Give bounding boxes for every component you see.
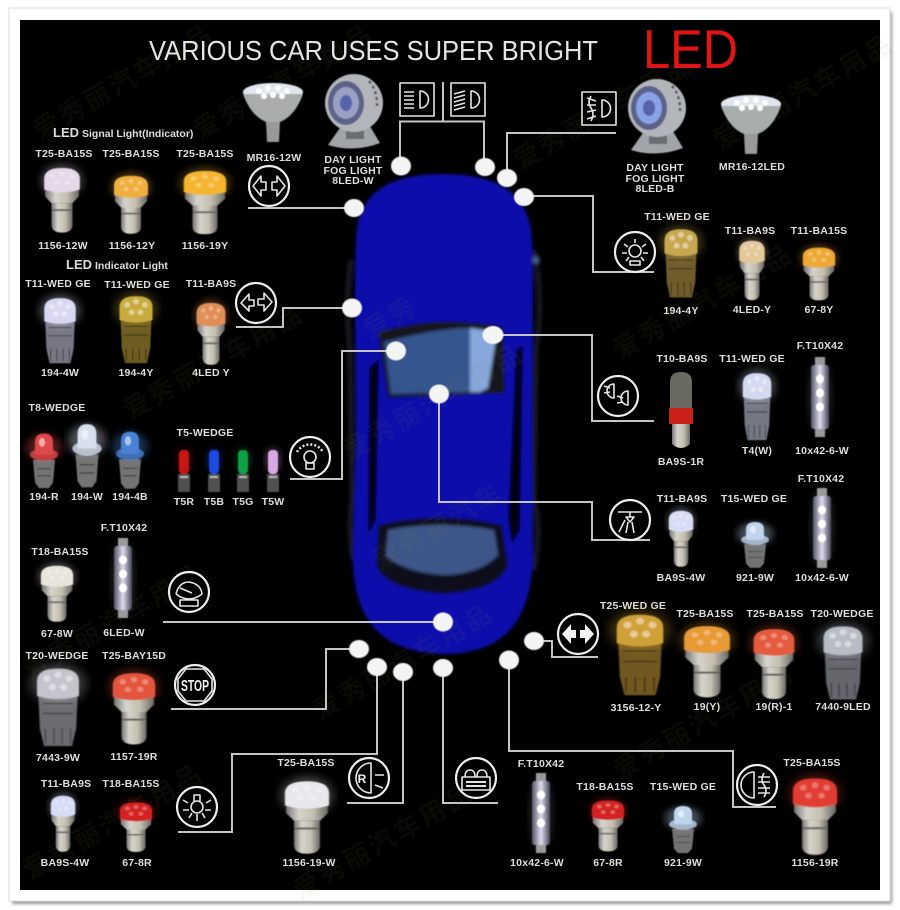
bulb: 4LED-Y	[725, 225, 775, 316]
bulb: 67-8Y: T11-BA15S	[791, 225, 847, 237]
bulb: BA9S-1R	[656, 353, 708, 468]
bulb: BA9S-4W	[41, 778, 91, 869]
watermark: 爱秀丽汽车用品	[606, 653, 800, 787]
bulb group: T5 wedge: T5B	[204, 496, 224, 508]
bulb: 67-8R rear left: T18-BA15S	[102, 778, 160, 790]
blue car top view	[348, 174, 540, 654]
bulb group: T8 wedge: 194-W	[71, 491, 103, 503]
bulb: 194-4Y	[104, 279, 170, 379]
bulb: 1156-19Y: T25-BA15S	[176, 148, 234, 160]
icon: license plate lamp	[169, 572, 209, 612]
bulb group: T5 wedge: T5R	[174, 496, 194, 508]
bulb: 1156-19R: 1156-19R	[791, 857, 839, 869]
watermark: 爱秀丽汽车用品	[286, 773, 480, 907]
bulb: 19(R)-1	[746, 608, 804, 713]
watermark: 爱秀丽汽车用品	[606, 233, 800, 367]
bulb: 1156-19R: T25-BA15S	[783, 757, 841, 769]
legend heading: LED indicator light: LED Indicator Light	[66, 257, 168, 272]
bulb: 67-8R rear right: 67-8R	[593, 857, 623, 869]
bulb: MR16-12LED: MR16-12LED	[719, 161, 785, 173]
bulb: 10x42-6-W lower: F.T10X42	[798, 473, 844, 485]
bulb: 1157-19R: 1157-19R	[110, 751, 158, 763]
bulb: 6LED-W: 6LED-W	[103, 627, 145, 639]
bulb: 1156-12Y: 1156-12Y	[109, 240, 155, 252]
bulb group: T8 wedge: 194-R	[29, 491, 59, 503]
watermark: 爱秀丽汽车用品	[116, 293, 310, 427]
bulb: fog light 8LED-W: DAY LIGHT	[324, 154, 382, 166]
bulb: 19(Y): 19(Y)	[694, 701, 720, 713]
bulb: 19(Y)	[676, 608, 734, 713]
icon: daytime sun lamp	[615, 232, 655, 272]
bulb: 921-9W bottom	[650, 781, 716, 869]
bulb group: T5 wedge: T5-WEDGE	[176, 427, 234, 439]
icon: number plate lights	[456, 758, 496, 798]
bulb: 67-8Y: 67-8Y	[804, 304, 834, 316]
bulb: 7443-9W: 7443-9W	[36, 752, 80, 764]
bulb: fog light 8LED-B: 8LED-B	[635, 183, 675, 195]
bulb: 1156-19Y	[176, 148, 234, 252]
bulb: BA9S-1R: T10-BA9S	[656, 353, 708, 365]
bulb: 194-4Y right: 194-4Y	[663, 305, 699, 317]
icon: reverse lamp	[349, 758, 389, 798]
bulb: 10x42-6-W upper: 10x42-6-W	[795, 445, 849, 457]
bulb: 67-8W: 67-8W	[41, 628, 73, 640]
bulb: BA9S-4W: T11-BA9S	[41, 778, 91, 790]
bulb: 67-8R rear left: 67-8R	[122, 857, 152, 869]
watermark: 爱秀丽汽车用品	[506, 43, 700, 177]
icon: side marker arrows	[236, 283, 276, 323]
icon: fog lamp	[582, 92, 616, 125]
bulb: 1156-19-W: 1156-19-W	[282, 857, 336, 869]
bulb: 6LED-W: F.T10X42	[101, 522, 147, 534]
icon: turn signal outline arrows	[249, 166, 289, 206]
bulb: fog light 8LED-B	[626, 79, 686, 195]
bulb group: T5 wedge	[174, 427, 284, 508]
bulb: 67-8R rear right: T18-BA15S	[576, 781, 634, 793]
bulb: 7440-9LED	[810, 608, 874, 713]
bulb: 194-4Y right: T11-WED GE	[644, 211, 710, 223]
bulb: 921-9W: 921-9W	[736, 572, 774, 584]
bulb: 1156-19Y: 1156-19Y	[182, 240, 228, 252]
bulb: 194-4Y right	[644, 211, 710, 317]
watermark: 爱秀丽汽车用品	[16, 753, 210, 887]
bulb: BA9S-4W: BA9S-4W	[41, 857, 89, 869]
bulb: fog light 8LED-W: 8LED-W	[332, 175, 374, 187]
icon: dome light	[610, 500, 650, 540]
watermark: 爱秀丽汽车用品	[336, 333, 530, 467]
bulb: 1156-12W: T25-BA15S	[35, 148, 93, 160]
bulb: 4LED Y: T11-BA9S	[186, 278, 236, 290]
bulb: 7440-9LED: T20-WEDGE	[810, 608, 874, 620]
icon: stop lamp: STOP	[181, 678, 209, 695]
bulb group: T8 wedge	[26, 402, 148, 503]
bulb: MR16-12LED	[719, 95, 785, 173]
bulb: BA9S-4W right: BA9S-4W	[657, 572, 705, 584]
bulb: 4LED Y: 4LED Y	[192, 367, 230, 379]
bulb: 921-9W: T15-WED GE	[721, 493, 787, 505]
bulb: 921-9W bottom: 921-9W	[664, 857, 702, 869]
bulb: BA9S-4W right: T11-BA9S	[657, 493, 707, 505]
connector lines	[163, 82, 776, 832]
bulb: 6LED-W	[101, 522, 147, 639]
icon: headlight high beam	[451, 83, 485, 116]
bulb: 3156-12-Y	[600, 600, 671, 714]
icon: parking lamp with rays	[177, 787, 217, 827]
bulb: 921-9W	[721, 493, 787, 584]
bulb: 10x42-6-W upper: F.T10X42	[797, 340, 843, 352]
bulb: 19(Y): T25-BA15S	[676, 608, 734, 620]
bulb: T4(W)	[719, 353, 785, 457]
bulb: 1156-19-W	[277, 757, 336, 869]
watermark: 爱秀丽汽车用品	[706, 23, 900, 157]
bulb: 3156-12-Y: 3156-12-Y	[611, 702, 661, 714]
bulb: T4(W): T4(W)	[742, 445, 772, 457]
bulb: 1156-19-W: T25-BA15S	[277, 757, 335, 769]
bulb: 1156-12W: 1156-12W	[38, 240, 88, 252]
bulb: 194-4Y: T11-WED GE	[104, 279, 170, 291]
bulb: MR16-12W: MR16-12W	[247, 152, 301, 164]
icon: stop lamp	[175, 665, 215, 705]
bulb: 10x42-6-W lower: 10x42-6-W	[795, 572, 849, 584]
bulb group: T8 wedge: 194-4B	[112, 491, 148, 503]
icon: map lights	[598, 376, 638, 416]
watermark: 爱秀丽汽车	[366, 472, 510, 577]
bulb: 3156-12-Y: T25-WED GE	[600, 600, 666, 612]
bulb: 67-8W: T18-BA15S	[31, 546, 89, 558]
title: LED	[643, 18, 738, 80]
bulb: 67-8R rear right	[576, 781, 634, 869]
bulb: 921-9W bottom: T15-WED GE	[650, 781, 716, 793]
bulb: 19(R)-1: 19(R)-1	[756, 701, 792, 713]
bulb: 4LED-Y: 4LED-Y	[733, 304, 771, 316]
watermark: 爱秀丽汽车用品	[26, 13, 220, 147]
bulb: 1157-19R: T25-BAY15D	[102, 650, 166, 662]
bulb: 1156-12Y: T25-BA15S	[102, 148, 160, 160]
bulb: 7443-9W	[25, 650, 89, 764]
watermark: 爱秀丽汽车用品	[16, 553, 210, 687]
bulb: 67-8Y	[791, 225, 847, 316]
bulb: BA9S-1R: BA9S-1R	[658, 456, 704, 468]
bulb: 194-4Y: 194-4Y	[118, 367, 154, 379]
bulb: 10x42-6-W bottom	[510, 758, 564, 869]
bulb: 10x42-6-W bottom: 10x42-6-W	[510, 857, 564, 869]
bulb: T4(W): T11-WED GE	[719, 353, 785, 365]
bulb group: T5 wedge: T5G	[232, 496, 254, 508]
bulb: 1156-12W	[35, 148, 93, 252]
bulb: 1156-12Y	[102, 148, 160, 252]
bulb: BA9S-4W right	[657, 493, 707, 584]
bulb: fog light 8LED-B: FOG LIGHT	[626, 173, 685, 185]
bulb: fog light 8LED-W: FOG LIGHT	[324, 165, 383, 177]
bulb: 4LED-Y: T11-BA9S	[725, 225, 775, 237]
bulb: 7440-9LED: 7440-9LED	[815, 701, 871, 713]
bulb group: T8 wedge: T8-WEDGE	[28, 402, 86, 414]
icon: rear turn signal filled arrows	[558, 614, 598, 654]
bulb: 67-8W	[31, 546, 89, 640]
bulb: fog light 8LED-B: DAY LIGHT	[626, 162, 684, 174]
icon: headlight low beam	[400, 83, 434, 116]
bulb: 1157-19R	[102, 650, 166, 763]
bulb: 19(R)-1: T25-BA15S	[746, 608, 804, 620]
title: VARIOUS CAR USES SUPER BRIGHT	[149, 35, 598, 66]
legend heading: LED signal light: LED Signal Light(Indicator)	[53, 125, 193, 140]
bulb group: T5 wedge: T5W	[262, 496, 284, 508]
icon: rear fog lamp	[737, 765, 777, 805]
icon: reverse lamp: R	[358, 772, 367, 786]
bulb: 10x42-6-W upper	[795, 340, 849, 457]
watermark: 爱秀	[356, 286, 424, 347]
bulb: 4LED Y	[186, 278, 236, 379]
bulb: 7443-9W: T20-WEDGE	[25, 650, 89, 662]
watermark: 爱秀丽汽车用品	[306, 593, 500, 727]
bulb: 1156-19R	[783, 757, 841, 869]
connection points	[342, 156, 544, 681]
bulb: 194-4W: T11-WED GE	[25, 278, 91, 290]
bulb: MR16-12W	[243, 83, 303, 164]
bulb: 10x42-6-W lower	[795, 473, 849, 584]
bulb: 10x42-6-W bottom: F.T10X42	[518, 758, 564, 770]
icon: dashboard lamp	[290, 437, 330, 477]
bulb: fog light 8LED-W	[324, 74, 383, 187]
watermark: 爱秀丽汽车用品	[186, 13, 380, 147]
title	[149, 18, 738, 80]
bulb: 194-4W: 194-4W	[41, 367, 79, 379]
bulb: 194-4W	[25, 278, 91, 379]
bulb: 67-8R rear left	[102, 778, 160, 869]
